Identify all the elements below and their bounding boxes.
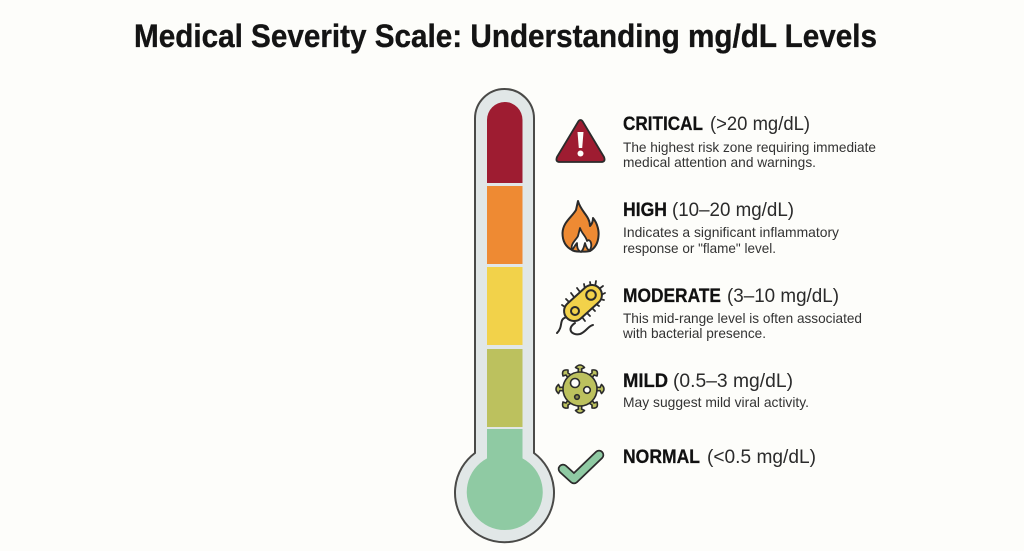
text block: normal (623, 447, 816, 468)
text block: normal: NORMAL (623, 447, 700, 468)
segment: normal bulb (467, 429, 543, 530)
text block: mild: May suggest mild viral activity. (623, 394, 809, 410)
icon: flame (562, 201, 599, 252)
segment: critical (487, 102, 522, 183)
text block: critical: (>20 mg/dL) (710, 114, 810, 135)
text block: high: response or "flame" level. (623, 240, 776, 256)
text block: mild (623, 371, 809, 410)
segment: high (487, 186, 522, 264)
text block: moderate: with bacterial presence. (622, 325, 766, 341)
text block: moderate (622, 286, 862, 341)
text block: moderate: MODERATE (623, 286, 721, 307)
segment: mild (487, 349, 522, 427)
text block: moderate: (3–10 mg/dL) (727, 286, 839, 307)
icon: warning triangle (556, 120, 605, 162)
icon: bacteria (557, 281, 606, 334)
thermometer glass (455, 89, 554, 542)
icon: virus (556, 365, 604, 413)
text block: mild: MILD (623, 371, 668, 392)
text block: mild: (0.5–3 mg/dL) (673, 371, 793, 392)
text block: critical: medical attention and warnings. (623, 154, 816, 170)
text block: critical (623, 114, 876, 170)
text block: normal: (<0.5 mg/dL) (707, 447, 816, 468)
title: Medical Severity Scale: Understanding mg/dL Levels (134, 18, 877, 54)
segment: moderate (487, 267, 522, 345)
thermometer (455, 89, 554, 542)
text block: high (623, 200, 839, 256)
text block: critical: The highest risk zone requiring immediate (623, 139, 876, 155)
text block: moderate: This mid-range level is often associated (623, 310, 862, 326)
icon: check mark (563, 455, 599, 479)
text block: high: Indicates a significant inflammatory (623, 224, 839, 240)
text block: high: (10–20 mg/dL) (672, 200, 794, 221)
text block: high: HIGH (623, 200, 667, 221)
text block: critical: CRITICAL (623, 114, 703, 135)
